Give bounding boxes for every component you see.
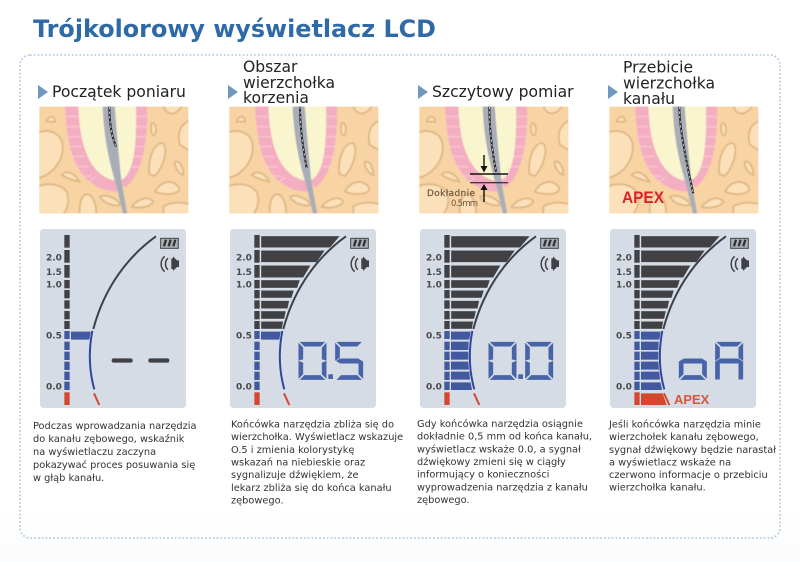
LCD display: 0.0 reading: 0.5 [426,332,442,342]
LCD display: 0.0 reading: 1.0 [426,280,442,290]
LCD display: 0.0 reading [420,229,566,408]
LCD display: start of descent: 1.5 [46,268,62,278]
illustration: tooth, apex perforation [607,103,762,217]
text block: column 2 description: Końcówka narzędzia zbliża się do [231,418,394,430]
text block: column 2 description: sygnalizuje dźwiękiem, że [231,469,358,481]
illustration: tooth, start of descent [37,103,192,217]
LCD display: 0.5 reading: 1.0 [236,280,252,290]
panel: column 4 heading: wierzchołka [623,74,715,92]
label: APEX on tooth: APEX [622,188,665,207]
text block: column 1 description: do kanału zębowego, wskaźnik [33,433,185,445]
text block: column 3 description: Gdy końcówka narzędzia osiągnie [417,418,583,430]
callout: 0.5 mm measurement marker: Dokładnie [427,189,475,199]
LCD display: oA reading with APEX: 0.0 [616,383,632,393]
text block: column 4 description: Jeśli końcówka narzędzia minie [608,418,761,430]
LCD display: start of descent: 0.0 [46,383,62,393]
LCD display: oA reading with APEX: 1.5 [616,268,632,278]
text block: column 1 description: pokazywać proces posuwania się [33,459,195,471]
LCD display: oA reading with APEX: 0.5 [616,332,632,342]
panel: column 4 heading: kanału [623,90,675,108]
text block: column 1 description: Podczas wprowadzania narzędzia [33,421,196,432]
text block: column 2 description: O.5 i zmienia kolorystykę [231,445,354,456]
text block: column 3 description: wyświetlacz wskaże 0.0, a sygnał [417,444,581,456]
text block: column 3 description: zębowego. [417,495,470,506]
panel: column 2 heading: korzenia [243,89,309,107]
text block: column 2 description: lekarz zbliża się do końca kanału [231,482,392,494]
text block: column 2 description: wskazań na niebieskie oraz [231,456,365,468]
LCD display: oA reading with APEX: APEX [674,393,710,407]
title: Trójkolorowy wyświetlacz LCD [33,15,436,43]
panel: column 2 heading [228,58,335,107]
LCD display: oA reading with APEX: 2.0 [616,253,632,263]
LCD display: 0.5 reading: 0.0 [236,383,252,393]
LCD display: 0.0 reading: 2.0 [426,253,442,263]
LCD display: 0.0 reading: 0.0 [426,383,442,393]
LCD display: start of descent: 0.5 [46,332,62,342]
LCD display: start of descent: 1.0 [46,280,62,290]
LCD display: 0.5 reading: 0.5 [236,332,252,342]
text block: column 4 description [608,418,776,494]
LCD display: 0.0 reading: 1.5 [426,268,442,278]
panel: column 4 heading: Przebicie [623,58,693,76]
text block: column 3 description: dokładnie 0,5 mm od końca kanału, [417,430,592,442]
text block: column 3 description: dźwiękowy zmieni się w ciągły [417,456,566,468]
panel: column 2 heading: Obszar [243,58,298,76]
text block: column 2 description [231,418,403,506]
text block: column 1 description [33,421,196,484]
LCD display: 0.5 reading [230,229,376,408]
panel: column 3 heading: Szczytowy pomiar [432,83,574,101]
panel: column 2 heading: wierzchołka [243,74,335,92]
callout: 0.5 mm measurement marker: 0.5mm [451,199,478,209]
LCD display: start of descent: 2.0 [46,253,62,263]
text block: column 4 description: wierzchołka kanału. [609,482,706,494]
text block: column 4 description: sygnał dźwiękowy będzie narastał [609,444,776,456]
text block: column 4 description: czerwono informacje o przebiciu [609,470,768,481]
text block: column 3 description: wyprowadzenia narzędzia z kanału [417,482,588,494]
LCD display: 0.5 reading: 1.5 [236,268,252,278]
text block: column 1 description: w głąb kanału. [33,473,104,484]
LCD display: 0.5 reading: 2.0 [236,253,252,263]
LCD display: oA reading with APEX: 1.0 [616,280,632,290]
text block: column 3 description [417,418,592,506]
text block: column 4 description: wierzchołek kanału zębowego, [609,432,759,443]
callout: 0.5 mm measurement marker [427,155,508,209]
text block: column 2 description: zębowego. [231,496,284,506]
illustration: tooth, root apex region [227,103,382,217]
text block: column 3 description: informujący o konieczności [417,468,549,480]
LCD display: start of descent [40,229,186,408]
panel: column 4 heading [608,58,715,108]
text block: column 4 description: a wyświetlacz wskaże na [609,456,731,468]
panel: column 1 heading: Początek poniaru [52,83,186,101]
LCD display: oA reading with APEX [610,229,756,408]
text block: column 1 description: na wyświetlaczu zaczyna [33,446,156,458]
illustration: tooth, peak measurement [417,103,572,217]
text block: column 2 description: wierzchołka. Wyświetlacz wskazuje [231,431,403,443]
